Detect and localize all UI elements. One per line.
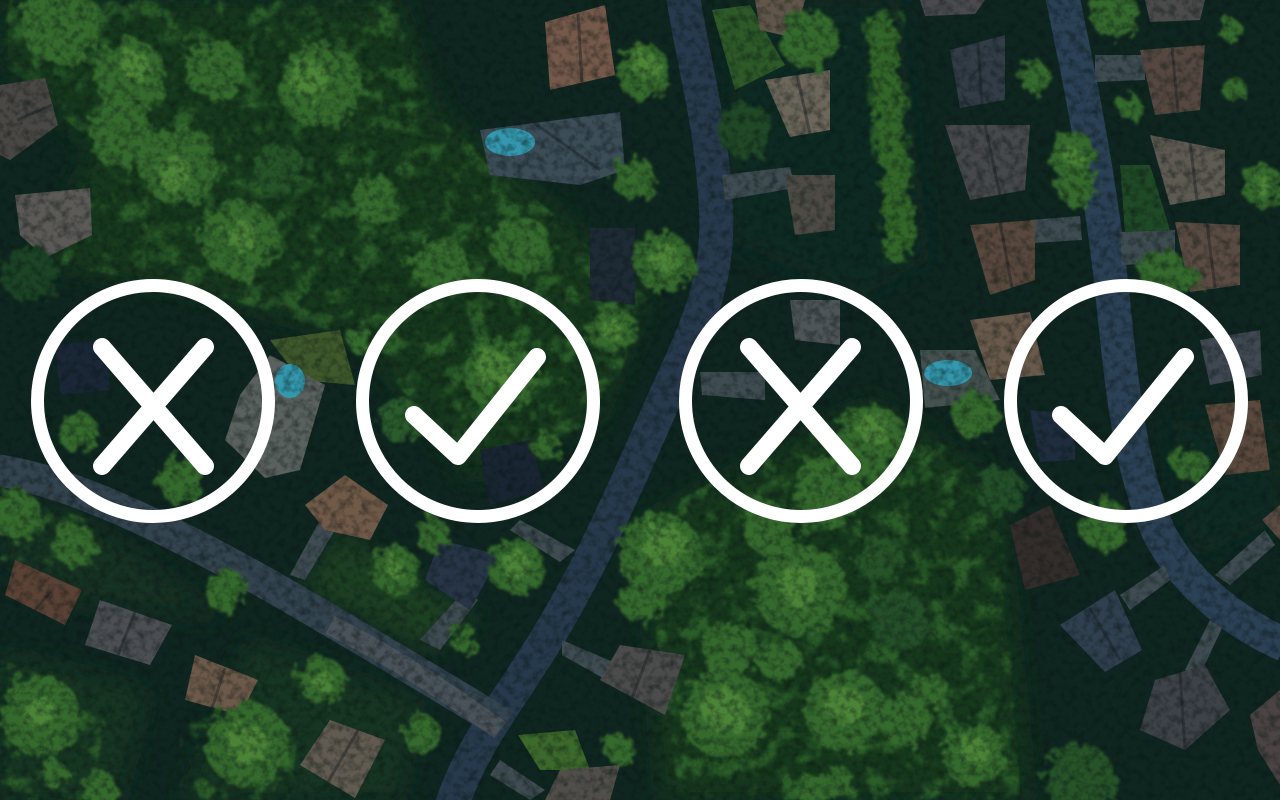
icon: cross in circle 3 xyxy=(686,286,916,516)
icon: cross in circle 1 xyxy=(38,286,268,516)
icon: check in circle 4 xyxy=(1010,286,1242,516)
driveways and lawns xyxy=(290,55,1275,800)
icon: check in circle 2 xyxy=(362,286,594,516)
mottled canopy texture xyxy=(0,0,1020,800)
